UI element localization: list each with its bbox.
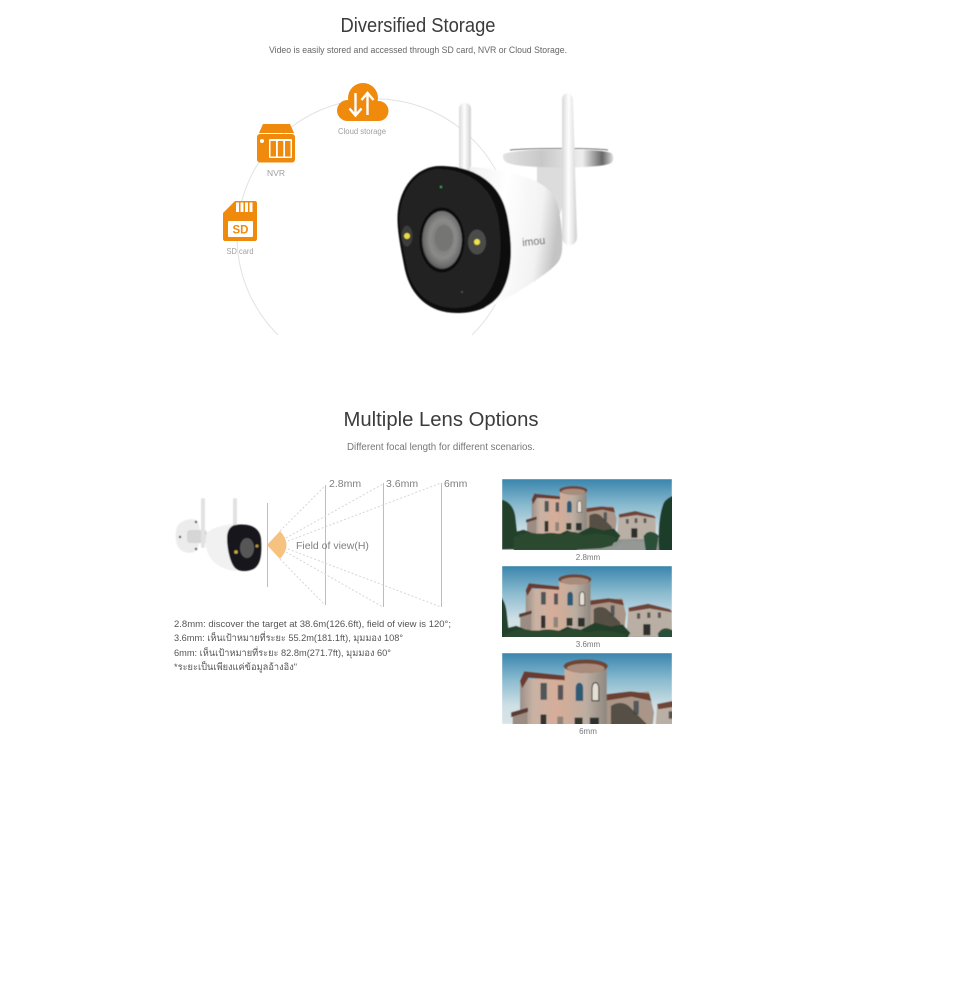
heading: Diversified Storage: Diversified Storage (340, 15, 496, 37)
microphone dot (461, 291, 463, 293)
vertical distance lines (268, 483, 442, 607)
lens (420, 208, 464, 272)
orange field of view fan (267, 531, 286, 559)
text block: lens specifications: 2.8mm: discover the target at 38.6m(126.6ft), field of view is 120°; (174, 619, 451, 630)
text block: lens specifications: *ระยะเป็นเพียงแค่ข้อมูลอ้างอิง" (174, 660, 297, 673)
camera black face rim (397, 166, 511, 313)
camera: large bullet camera (397, 93, 613, 313)
label: 3.6mm: 3.6mm (386, 478, 418, 490)
left spotlight (402, 226, 412, 246)
diagram: field of view (176, 478, 468, 607)
panel: storage options diagram (223, 83, 613, 335)
status LED (440, 186, 442, 188)
text block: lens specifications: 6mm: เห็นเป้าหมายที่ระยะ 82.8m(271.7ft), มุมมอง 60° (174, 646, 391, 659)
icon: NVR (257, 124, 295, 162)
photo: 6mm view (502, 653, 672, 724)
arc connecting storage options (237, 99, 513, 335)
label: NVR: NVR (267, 168, 285, 178)
brand label: imou (522, 235, 546, 249)
camera body (462, 167, 562, 312)
camera mount plate (503, 149, 613, 168)
right spotlight (468, 230, 486, 254)
photo: 2.8mm view (502, 479, 675, 553)
camera black face (399, 169, 501, 308)
icon: SD card: SD (233, 224, 248, 236)
photo: 3.6mm view (502, 566, 672, 637)
right antenna (562, 93, 577, 245)
label: Field of view: Field of view(H) (296, 540, 369, 552)
dashed field of view rays (280, 483, 441, 607)
label: Cloud storage: Cloud storage (338, 126, 386, 136)
label: 6mm: 6mm (444, 478, 468, 490)
icon: cloud storage (337, 83, 388, 121)
caption: 3.6mm: 3.6mm (576, 640, 601, 649)
heading: Multiple Lens Options: Multiple Lens Options (344, 409, 538, 431)
left antenna (459, 103, 471, 171)
caption: 6mm: 6mm (579, 727, 597, 736)
caption: 2.8mm: 2.8mm (576, 553, 601, 562)
camera mount arm (537, 165, 563, 217)
label: 2.8mm: 2.8mm (329, 478, 361, 490)
text block: lens specifications: 3.6mm: เห็นเป้าหมายที่ระยะ 55.2m(181.1ft), มุมมอง 108° (174, 631, 403, 644)
small camera (176, 498, 261, 571)
subheading: storage description: Video is easily stored and accessed through SD card, NVR or Cloud Storage. (269, 45, 567, 56)
icon: SD card (223, 201, 257, 241)
text block: lens specifications (174, 619, 451, 673)
label: SD card: SD card (226, 246, 254, 256)
subheading: lens description: Different focal length for different scenarios. (347, 442, 535, 453)
